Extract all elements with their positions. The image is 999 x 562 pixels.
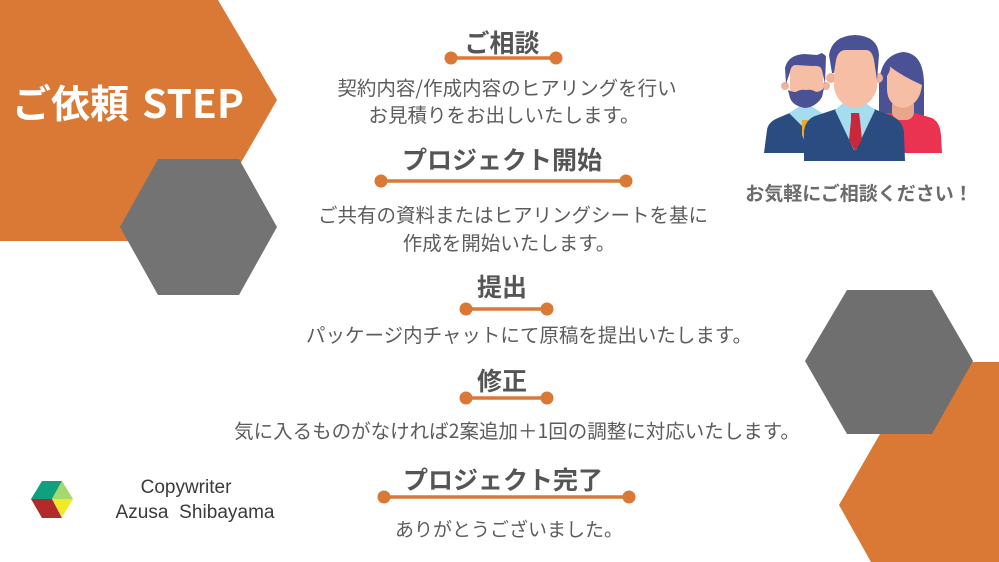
step 5 connector (378, 490, 636, 504)
title: STEP (142, 74, 244, 130)
orange hexagon bottom right (839, 362, 999, 562)
step 1: consultation (337, 24, 677, 128)
caption: feel free to consult: お気軽にご相談ください！ (745, 179, 973, 206)
step 2 description: 作成を開始いたします。 (403, 227, 615, 256)
gray hexagon right (805, 290, 973, 434)
icon: three business people (764, 35, 942, 161)
step 4 description: 気に入るものがなければ2案追加＋1回の調整に対応いたします。 (234, 415, 800, 444)
step 1 description: お見積りをお出しいたします。 (368, 99, 640, 128)
step 2 heading: プロジェクト開始 (402, 141, 602, 177)
step 5 heading: プロジェクト完了 (403, 461, 603, 497)
title: ご依頼 (12, 74, 129, 130)
step 1 description: 契約内容/作成内容のヒアリングを行い (337, 72, 677, 101)
author credit (116, 477, 275, 523)
person left (764, 53, 834, 153)
gray hexagon top left (120, 159, 277, 295)
person right (879, 52, 942, 153)
step 3: submission (306, 268, 752, 348)
step 4: revision (234, 362, 800, 444)
step 4 connector (460, 392, 554, 404)
step 4 heading: 修正 (477, 362, 527, 398)
step 2 description (318, 199, 708, 256)
author credit: Azusa Shibayama (116, 502, 275, 523)
person center (804, 35, 905, 161)
step 3 description: パッケージ内チャットにて原稿を提出いたします。 (306, 319, 752, 348)
step 1 heading: ご相談 (464, 24, 540, 60)
step 5: project complete (378, 461, 636, 542)
step 2: project start (318, 141, 708, 256)
author credit: Copywriter (141, 477, 232, 498)
panel: orange title hexagon (0, 0, 277, 241)
logo: colored hexagon (31, 481, 73, 518)
step 2 description: ご共有の資料またはヒアリングシートを基に (318, 199, 708, 228)
step 5 description: ありがとうございました。 (395, 515, 623, 542)
step 3 connector (460, 302, 554, 316)
step 3 heading: 提出 (477, 268, 527, 304)
step 1 connector (444, 52, 562, 64)
step 1 description (337, 72, 677, 128)
step 2 connector (374, 174, 632, 188)
